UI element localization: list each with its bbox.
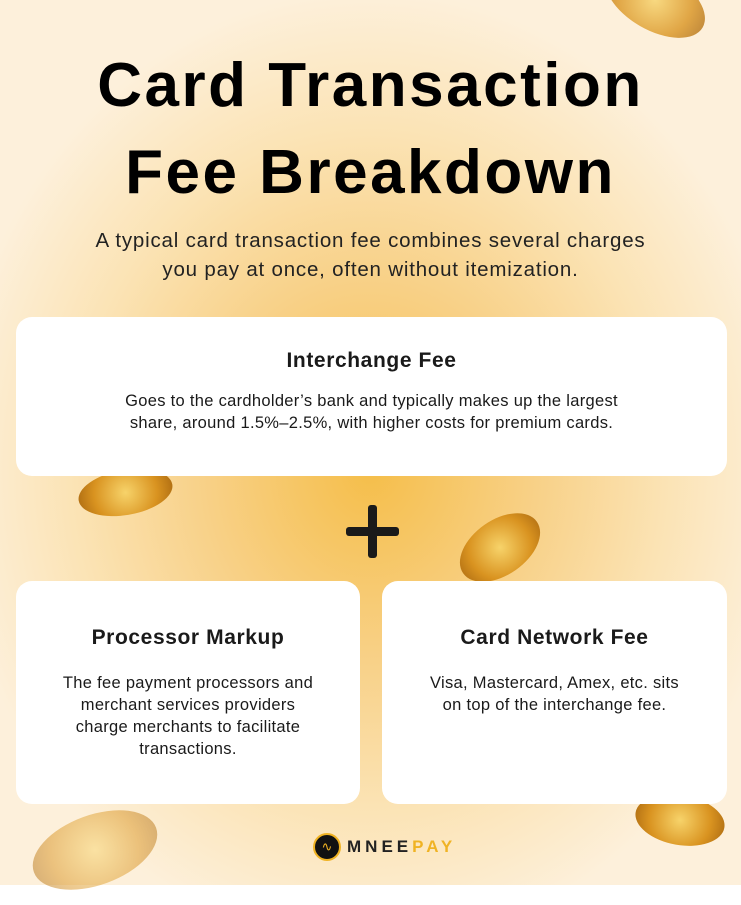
- panel: interchange fee: Interchange Fee: [286, 349, 457, 372]
- decorative coin bottom left: [22, 795, 168, 905]
- panel: processor markup: [16, 581, 360, 804]
- subtitle: you pay at once, often without itemization.: [162, 258, 579, 281]
- panel: processor markup: merchant services providers: [81, 696, 295, 714]
- logo: [313, 833, 456, 861]
- logo text: MNEEPAY: [347, 837, 456, 856]
- subtitle: A typical card transaction fee combines several charges: [96, 229, 645, 252]
- title: Card Transaction: [97, 51, 644, 120]
- panel: processor markup: The fee payment processors and: [63, 674, 313, 692]
- panel: interchange fee: [16, 317, 727, 476]
- panel: interchange fee: share, around 1.5%–2.5%, with higher costs for premium cards.: [130, 414, 613, 432]
- decorative coin left: [75, 462, 176, 523]
- panel: card network fee: Visa, Mastercard, Amex, etc. sits: [430, 674, 679, 692]
- icon: plus: [346, 505, 399, 558]
- decorative coin center: [447, 499, 553, 596]
- panel: processor markup: Processor Markup: [92, 626, 284, 649]
- icon: logo mark: [313, 833, 341, 861]
- panel: card network fee: on top of the interchange fee.: [443, 696, 666, 714]
- panel: processor markup: charge merchants to facilitate: [76, 718, 300, 736]
- icon: logo mark: ∿: [322, 839, 332, 854]
- decorative coin top right: [592, 0, 718, 53]
- panel: card network fee: Card Network Fee: [460, 626, 649, 649]
- title: [97, 51, 644, 207]
- title: Fee Breakdown: [125, 138, 616, 207]
- panel: interchange fee: Goes to the cardholder’s bank and typically makes up the largest: [125, 392, 618, 410]
- subtitle: [96, 229, 645, 281]
- decorative coin bottom right: [631, 788, 729, 852]
- panel: card network fee: [382, 581, 727, 804]
- panel: processor markup: transactions.: [139, 740, 237, 758]
